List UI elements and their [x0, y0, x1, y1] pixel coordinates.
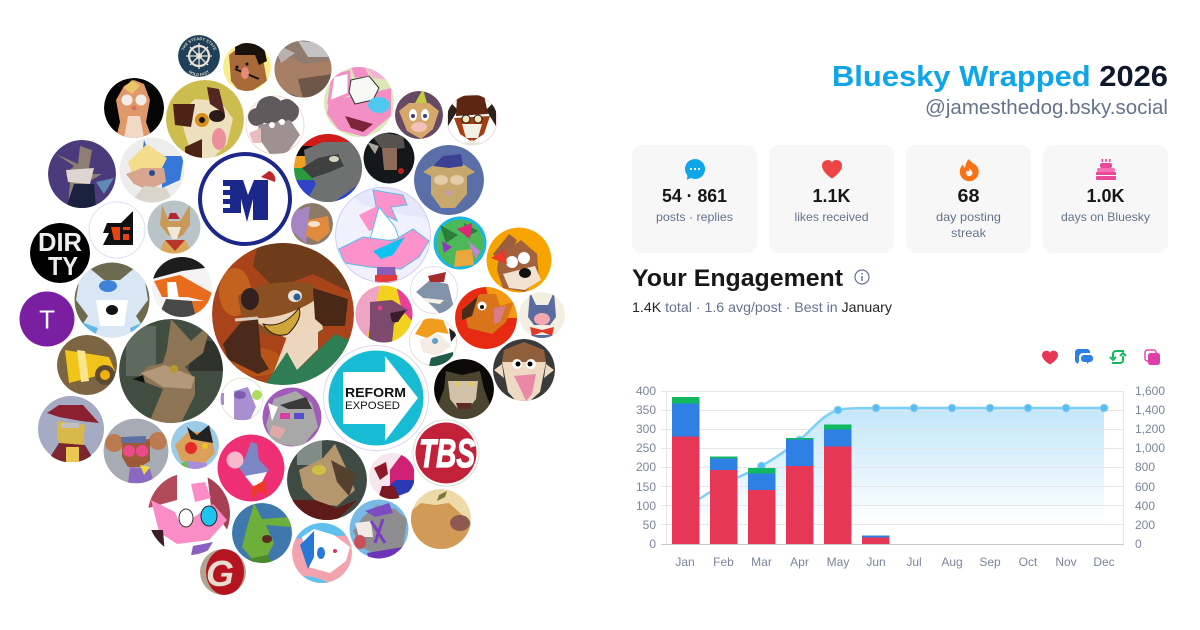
avatar: grey dragon — [410, 266, 458, 314]
left axis labels: 350 — [636, 403, 656, 417]
avatar: dog with eyepatch — [166, 80, 244, 158]
avatar: yellow bubble glyph — [57, 335, 117, 395]
avatar: fox fursuit — [148, 200, 200, 254]
legend — [1042, 349, 1160, 365]
avatar: pink bunny with blue nose — [324, 67, 394, 137]
avatar: purple wolf with pink hair — [355, 285, 413, 343]
left axis labels: 0 — [649, 537, 656, 551]
bar: Mar — [748, 468, 776, 544]
avatar: orange character with red nose — [171, 421, 219, 469]
avatar: tan bear with sprout — [411, 489, 471, 549]
avatar: grey raccoon on rainbow — [294, 134, 362, 202]
avatar: lynx in red hat — [38, 396, 104, 462]
left axis labels: 150 — [636, 480, 656, 494]
engagement summary: 1.4K total · 1.6 avg/post · Best in January — [632, 299, 892, 315]
icon: legend reposts — [1110, 351, 1126, 363]
avatar: DIRTY logo: TY — [48, 251, 78, 281]
avatar: large pink bunny with blue nose — [148, 473, 230, 555]
avatar: tan coyote with red — [287, 440, 367, 520]
avatar: red G letter — [200, 549, 246, 595]
avatar: DIRTY logo — [30, 223, 90, 283]
avatar: steady state wheel badge: THE STEADY STATE — [181, 37, 216, 50]
avatar: purple T initial — [20, 292, 74, 346]
avatar: purple T initial: T — [39, 304, 55, 334]
avatar: orange fox comic — [152, 257, 212, 317]
avatar: small purple-orange fox — [291, 203, 333, 245]
value: 68 — [958, 186, 980, 206]
month labels — [675, 555, 1115, 569]
month labels: Aug — [941, 555, 963, 569]
right axis labels: 1,600 — [1135, 384, 1165, 398]
avatar cluster — [20, 35, 565, 595]
month labels: Feb — [713, 555, 734, 569]
icon: info — [855, 270, 869, 284]
month labels: Jan — [675, 555, 695, 569]
bar: May — [824, 424, 852, 544]
handle: @jamesthedog.bsky.social — [925, 97, 1168, 119]
avatar: blue and white fox — [292, 523, 352, 583]
avatar: steady state wheel badge: HOLD FAST — [188, 70, 209, 76]
month labels: Sep — [979, 555, 1001, 569]
avatar: large brown wolf with cigarette — [212, 243, 354, 385]
avatar: orange background dog — [486, 228, 552, 292]
label: days on Bluesky — [1061, 210, 1150, 224]
label: posts · replies — [656, 210, 733, 224]
avatar: pink wolf with bubblegum — [218, 434, 284, 502]
x axis line — [661, 544, 1124, 546]
stat card: days on Bluesky — [1043, 145, 1168, 253]
left axis labels: 100 — [636, 499, 656, 513]
avatar: small purple white fox — [220, 378, 264, 420]
avatar: coyote on purple — [48, 140, 116, 208]
right axis labels: 1,000 — [1135, 441, 1165, 455]
left axis labels — [636, 384, 656, 551]
left axis labels: 300 — [636, 422, 656, 436]
right axis labels: 1,400 — [1135, 403, 1165, 417]
avatar: grey sheep — [246, 96, 304, 154]
right axis labels — [1135, 384, 1165, 551]
avatar: red G letter: G — [206, 553, 234, 594]
value: 1.0K — [1086, 186, 1124, 206]
avatar: orange haired character — [409, 318, 457, 366]
avatar: dark lion face — [434, 359, 494, 419]
avatar: Reform Exposed arrow: REFORM — [345, 386, 406, 400]
avatar: dog with cap and tongue — [493, 339, 555, 401]
bar: Feb — [710, 456, 738, 544]
stat card: posts and replies — [632, 145, 757, 253]
avatar: brown mouse with pink glasses — [104, 418, 168, 484]
icon: legend heart — [1042, 351, 1058, 364]
title: Bluesky Wrapped 2026 — [832, 61, 1168, 93]
right axis labels: 800 — [1135, 460, 1155, 474]
month labels: Dec — [1093, 555, 1115, 569]
avatar: green dog on blue — [232, 503, 292, 563]
grid — [661, 391, 1124, 544]
avatar: old man in dark hat — [364, 132, 414, 184]
avatar: Reform Exposed arrow — [324, 346, 428, 450]
avatar: green tropical — [434, 216, 486, 270]
avatar: brown blocky dog — [223, 43, 271, 91]
engagement chart — [636, 384, 1165, 569]
month labels: Mar — [751, 555, 772, 569]
avatar: bi-colour character — [369, 453, 415, 499]
avatar: TBS logo — [413, 420, 479, 486]
avatar: Reform Exposed arrow: EXPOSED — [345, 400, 400, 412]
month labels: Jul — [906, 555, 922, 569]
icon: chat bubble — [685, 159, 705, 180]
icon: legend replies — [1075, 349, 1093, 364]
label line 2: streak — [951, 226, 987, 240]
avatar: blue husky fursuit — [74, 262, 150, 338]
month labels: Nov — [1055, 555, 1077, 569]
month labels: May — [827, 555, 849, 569]
avatar: grey spiky figure — [273, 40, 332, 99]
area: cumulative engagement — [685, 408, 1104, 544]
avatar: orange wolf on red burst — [455, 287, 517, 349]
line: cumulative engagement — [685, 404, 1108, 507]
right axis labels: 0 — [1135, 537, 1142, 551]
icon: heart — [822, 160, 842, 178]
stat card: likes — [769, 145, 894, 253]
avatar: M logo — [198, 152, 292, 246]
icon: flame — [960, 159, 979, 181]
avatar: grey wolf with pink glasses — [262, 388, 322, 447]
left axis labels: 50 — [643, 518, 656, 532]
left axis labels: 250 — [636, 441, 656, 455]
avatar: blue character with bowtie — [519, 292, 565, 338]
icon: cake — [1096, 159, 1116, 180]
heading: Your Engagement: Your Engagement — [632, 265, 843, 292]
month labels: Apr — [790, 555, 809, 569]
month labels: Jun — [866, 555, 886, 569]
avatar: steady state wheel badge — [178, 35, 220, 77]
right axis labels: 1,200 — [1135, 422, 1165, 436]
stat card: streak — [906, 145, 1031, 253]
right axis labels: 400 — [1135, 499, 1155, 513]
avatar: tan mouse — [395, 89, 443, 139]
value: 1.1K — [812, 186, 850, 206]
avatar: trf logo — [89, 202, 145, 258]
avatar: DIRTY logo: DIR — [38, 227, 82, 257]
avatar: big pink and white dog — [335, 187, 431, 283]
avatar: blue lion — [414, 145, 484, 215]
left axis labels: 200 — [636, 460, 656, 474]
icon: legend quotes — [1145, 350, 1160, 365]
right axis labels: 200 — [1135, 518, 1155, 532]
avatar: TBS logo: TBS — [419, 432, 475, 476]
label: day posting — [936, 210, 1001, 224]
bar: Jan — [672, 397, 700, 544]
value: 54 · 861 — [662, 186, 727, 206]
avatar: black bg bunny — [104, 78, 164, 138]
avatar: fox with glasses — [446, 94, 498, 146]
avatar: blonde character — [120, 138, 184, 203]
bar: Jun — [862, 536, 890, 544]
avatar: grey wolf with purple harness — [350, 500, 408, 559]
bar: Apr — [786, 438, 814, 544]
label: likes received — [794, 210, 868, 224]
left axis labels: 400 — [636, 384, 656, 398]
month labels: Oct — [1019, 555, 1038, 569]
right axis labels: 600 — [1135, 480, 1155, 494]
avatar: coyote in window — [119, 319, 223, 423]
